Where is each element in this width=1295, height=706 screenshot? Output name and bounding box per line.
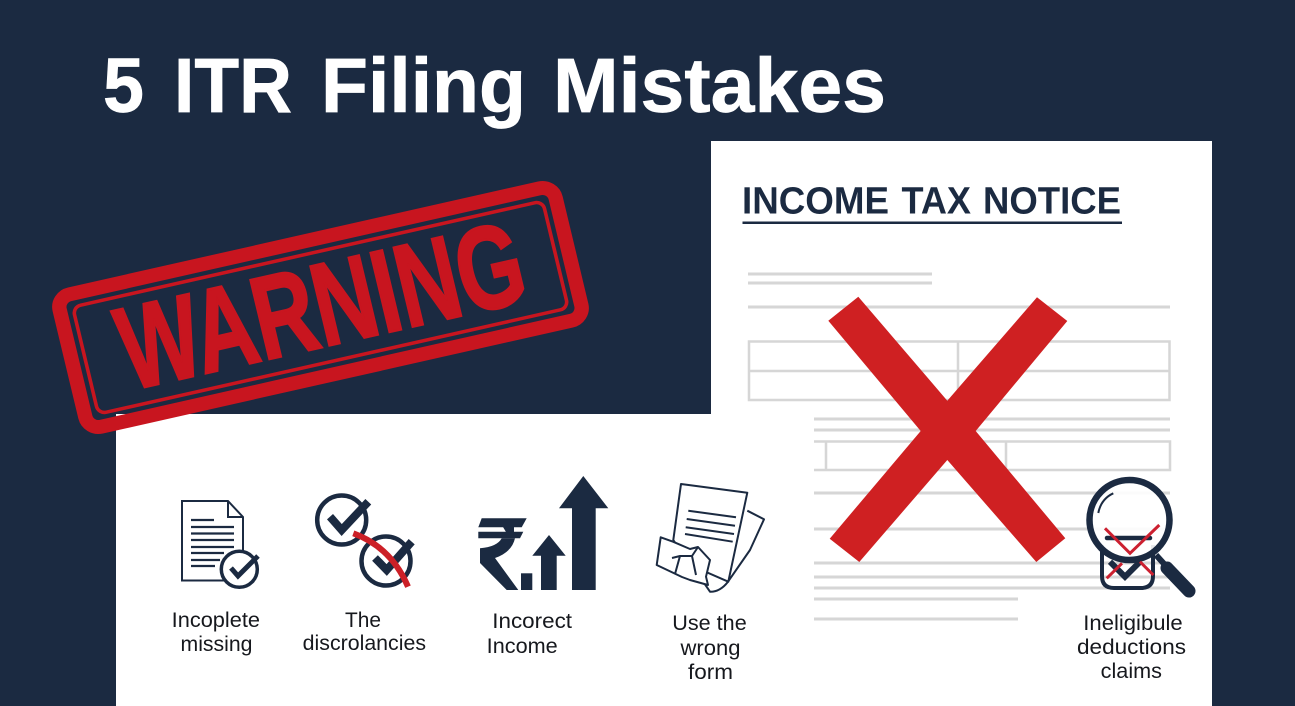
label: incomplete missing [172,609,260,656]
heading: income tax notice [742,180,1122,224]
icon: document with check [182,501,258,587]
warning stamp [57,185,584,430]
label: ineligible deductions claims: Ineligibule [1083,612,1183,635]
big red X [828,297,1067,562]
item 5: ineligible deductions claims [1077,480,1189,683]
label: the discrepancies: discrolancies [303,632,426,655]
label: the discrepancies [303,609,426,655]
title: Mistakes [553,43,886,129]
heading: income tax notice: NOTICE [983,180,1121,222]
label: incorrect income: Income [487,635,558,658]
label: incomplete missing: Incoplete [172,609,260,632]
item 4: use the wrong form [657,484,764,684]
icon: crumpled paper sheets [657,484,764,592]
label: incorrect income: Incorect [492,610,572,633]
icon: rupee with rising arrows [478,476,608,590]
label: ineligible deductions claims: claims [1101,660,1162,683]
label: incomplete missing: missing [180,633,252,656]
label: ineligible deductions claims: deductions [1077,636,1186,659]
label: use the wrong form: form [688,661,733,684]
label: use the wrong form [672,612,747,684]
title [103,43,886,129]
title: Filing [321,43,526,129]
label: ineligible deductions claims [1077,612,1186,683]
icon: magnifier over clipboard with red crosses [1090,480,1189,591]
title: ITR [174,43,292,129]
icon: two checks with red slash [317,496,412,587]
item 1: incomplete missing [172,501,260,656]
label: use the wrong form: wrong [679,637,740,660]
panel: white document background [116,141,1212,706]
label: use the wrong form: Use the [672,612,747,635]
document form lines and tables [748,274,1170,619]
title: 5 [103,43,144,129]
item 3: incorrect income [478,476,608,658]
heading: income tax notice: INCOME [742,180,889,222]
item 2: the discrepancies [303,496,426,655]
heading: income tax notice: TAX [902,180,972,222]
label: the discrepancies: The [345,609,381,632]
label: incorrect income [487,610,572,658]
warning stamp: WARNING [105,197,538,416]
